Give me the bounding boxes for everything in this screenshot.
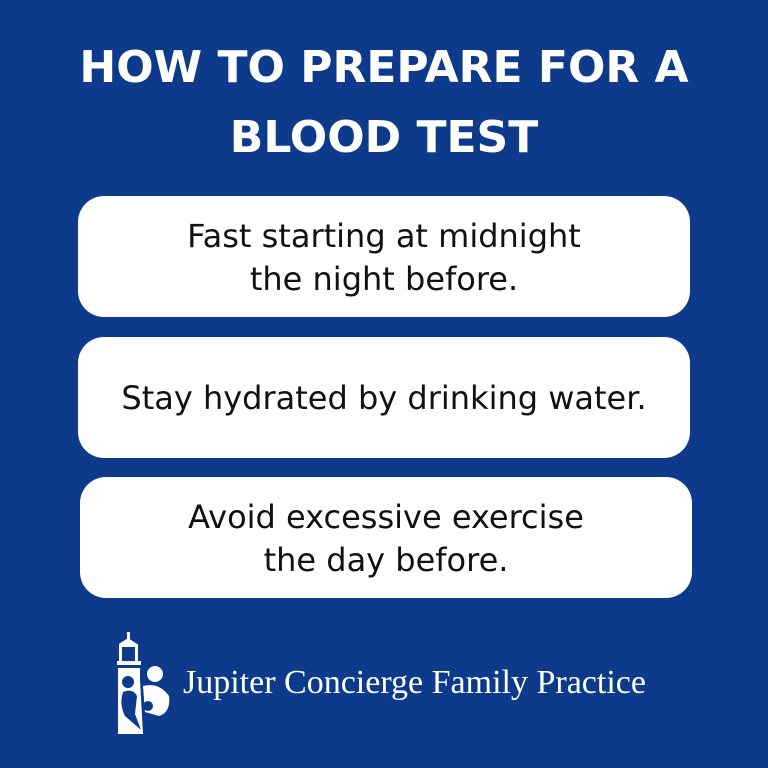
card: fasting	[78, 196, 690, 317]
title: HOW TO PREPARE FOR A	[79, 42, 689, 93]
card: exercise	[80, 477, 692, 598]
card: fasting: the night before.	[250, 260, 518, 298]
card: exercise: the day before.	[264, 540, 508, 578]
card: hydration	[78, 337, 690, 458]
logo	[117, 632, 646, 734]
brand name: Jupiter Concierge Family Practice	[183, 664, 646, 701]
card: fasting: Fast starting at midnight	[187, 216, 581, 254]
card: exercise: Avoid excessive exercise	[188, 498, 584, 536]
title	[79, 42, 689, 163]
title: BLOOD TEST	[230, 112, 538, 163]
card: hydration: Stay hydrated by drinking water.	[121, 379, 647, 417]
icon: lighthouse with family	[117, 632, 170, 734]
